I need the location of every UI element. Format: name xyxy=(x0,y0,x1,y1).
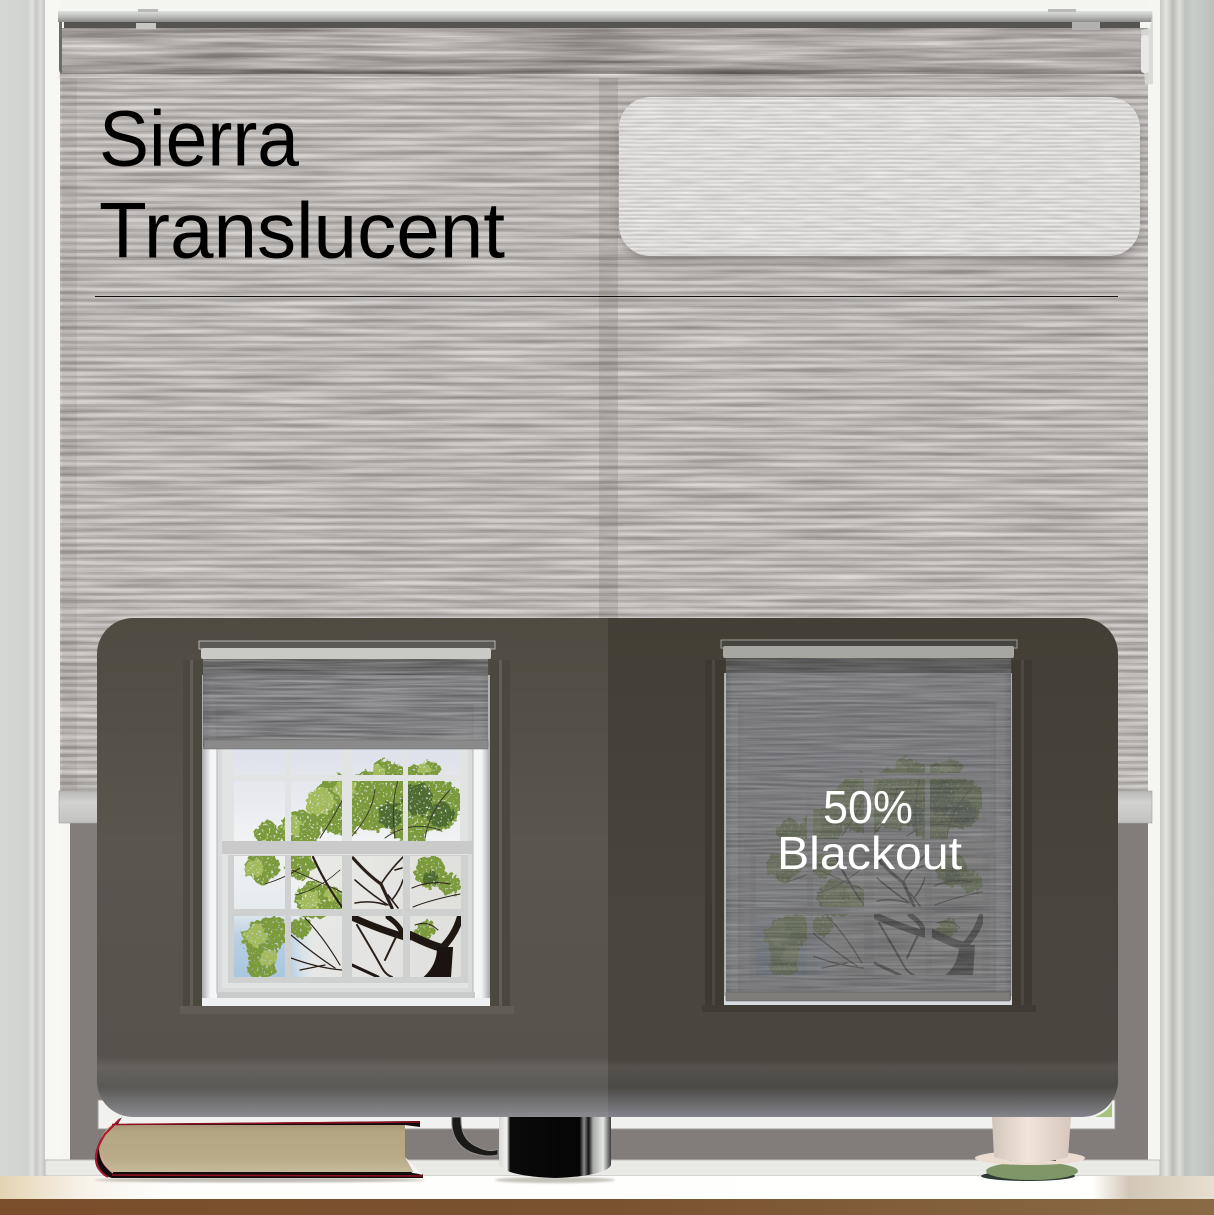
fabric swatch xyxy=(619,97,1140,261)
shade seam xyxy=(599,78,618,619)
window: shade raised xyxy=(180,641,514,1014)
panel: right half, shade lowered xyxy=(608,618,1118,1117)
panel: left half, shade raised xyxy=(97,618,608,1117)
title xyxy=(99,94,505,274)
title: Translucent xyxy=(99,186,505,274)
title: Sierra xyxy=(99,94,299,182)
roller shade, lowered xyxy=(721,640,1017,1001)
label: 50% Blackout: 50% xyxy=(823,781,913,833)
roller shade, raised xyxy=(199,641,495,749)
comparison panel xyxy=(97,618,1118,1117)
plant pot xyxy=(975,1117,1085,1181)
window sill xyxy=(0,1176,1214,1215)
hem bar brackets xyxy=(59,791,1152,823)
roller shade fabric xyxy=(60,28,1148,798)
label: 50% Blackout: Blackout xyxy=(777,827,962,879)
mug xyxy=(452,1117,615,1183)
label: 50% Blackout xyxy=(777,781,962,879)
book xyxy=(95,1117,425,1182)
headrail and roller xyxy=(58,9,1153,85)
divider rule xyxy=(95,296,1118,297)
window: shade lowered xyxy=(702,640,1036,1012)
